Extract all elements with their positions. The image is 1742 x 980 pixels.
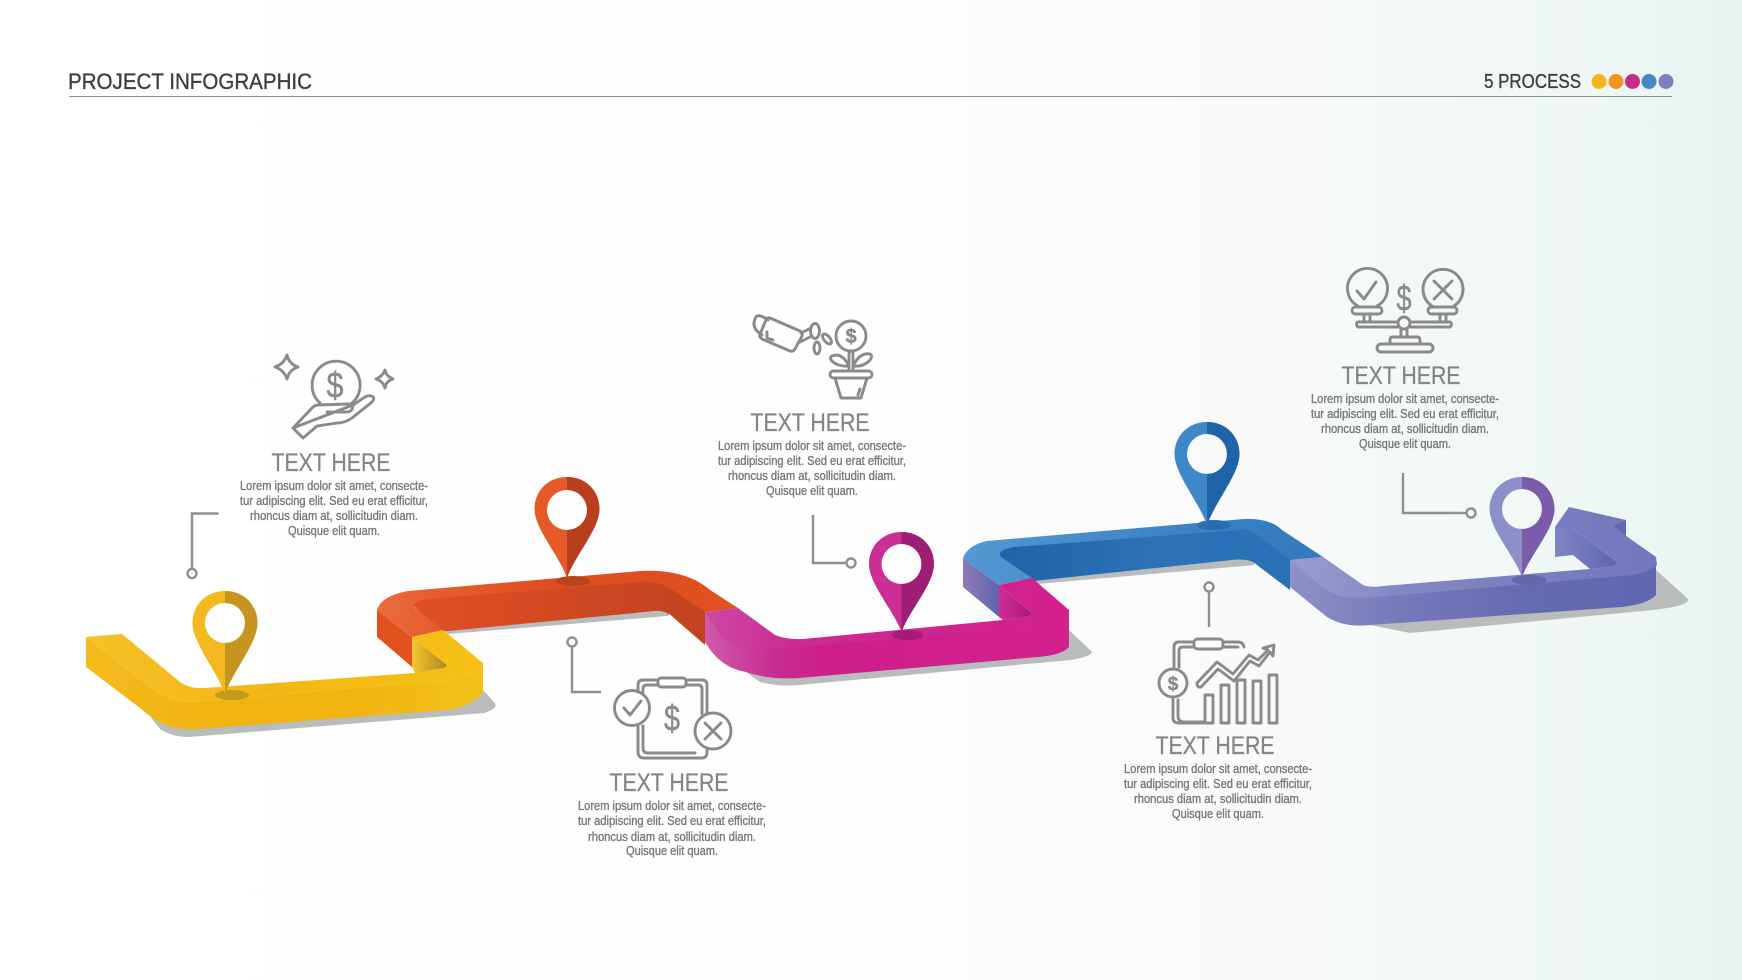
body text: tur adipiscing elit. Sed eu erat efficitur, [578, 814, 766, 828]
heading: TEXT HERE [750, 409, 870, 437]
pin: purple [1490, 477, 1554, 585]
body text: Quisque elit quam. [626, 844, 718, 858]
pin: orange [534, 477, 600, 586]
connector: step 1 [188, 514, 218, 578]
body text: Lorem ipsum dolor sit amet, consecte- [718, 439, 906, 453]
panel: step 3 [718, 316, 906, 498]
body text [718, 439, 906, 498]
body text [1311, 392, 1499, 451]
pin: blue [1174, 422, 1240, 530]
heading: TEXT HERE [1156, 732, 1274, 760]
body text: Quisque elit quam. [766, 484, 858, 498]
panel: step 4 [1124, 639, 1312, 821]
body text: rhoncus diam at, sollicitudin diam. [250, 509, 418, 523]
panel: step 5 [1311, 268, 1499, 451]
heading: TEXT HERE [1342, 362, 1460, 390]
icon: watering can and money plant: $ [845, 326, 857, 348]
body text: tur adipiscing elit. Sed eu erat efficitur, [1124, 777, 1312, 791]
process label: 5 PROCESS [1484, 71, 1581, 93]
icon: balance scale: $ [1396, 278, 1412, 318]
icon: hand with coin: $ [326, 364, 344, 406]
body text [240, 479, 428, 538]
body text: Lorem ipsum dolor sit amet, consecte- [578, 799, 766, 813]
road shadows [150, 555, 1688, 737]
body text: Lorem ipsum dolor sit amet, consecte- [1311, 392, 1499, 406]
connector: step 3 [813, 515, 856, 568]
header [68, 69, 1674, 97]
road segment: yellow [86, 630, 483, 729]
connector: step 5 [1403, 473, 1476, 518]
panel: step 2 [578, 678, 766, 858]
body text: rhoncus diam at, sollicitudin diam. [1321, 422, 1489, 436]
connector: step 4 [1205, 582, 1214, 627]
icon: clipboard with growth chart: $ [1168, 674, 1179, 695]
icon: watering can and money plant [754, 316, 872, 398]
road segment: orange [377, 571, 738, 667]
connector: step 2 [568, 638, 601, 692]
body text: Quisque elit quam. [288, 524, 380, 538]
icon: clipboard with check and cross [614, 678, 731, 758]
road segment: blue [963, 519, 1323, 617]
body text [1124, 762, 1312, 821]
body text: Quisque elit quam. [1172, 807, 1264, 821]
body text [578, 799, 766, 858]
body text: tur adipiscing elit. Sed eu erat efficitur, [240, 494, 428, 508]
title: PROJECT INFOGRAPHIC [68, 69, 312, 94]
body text: tur adipiscing elit. Sed eu erat efficitur, [1311, 407, 1499, 421]
icon: clipboard with growth chart [1159, 639, 1277, 723]
icon: balance scale [1347, 268, 1463, 352]
body text: rhoncus diam at, sollicitudin diam. [588, 830, 756, 844]
icon: hand with coin [275, 355, 393, 438]
body text: rhoncus diam at, sollicitudin diam. [1134, 792, 1302, 806]
heading: TEXT HERE [610, 769, 728, 797]
pin: magenta [869, 532, 934, 640]
pin: yellow [192, 591, 258, 700]
road segment: purple arrow [1290, 507, 1657, 626]
legend dots [1592, 74, 1674, 89]
icon: clipboard with check and cross: $ [664, 698, 680, 738]
body text: Quisque elit quam. [1359, 437, 1451, 451]
road segment: magenta [705, 578, 1069, 678]
body text: rhoncus diam at, sollicitudin diam. [728, 469, 896, 483]
heading: TEXT HERE [272, 449, 390, 477]
body text: tur adipiscing elit. Sed eu erat efficitur, [718, 454, 906, 468]
panel: step 1 [240, 355, 428, 538]
body text: Lorem ipsum dolor sit amet, consecte- [1124, 762, 1312, 776]
body text: Lorem ipsum dolor sit amet, consecte- [240, 479, 428, 493]
